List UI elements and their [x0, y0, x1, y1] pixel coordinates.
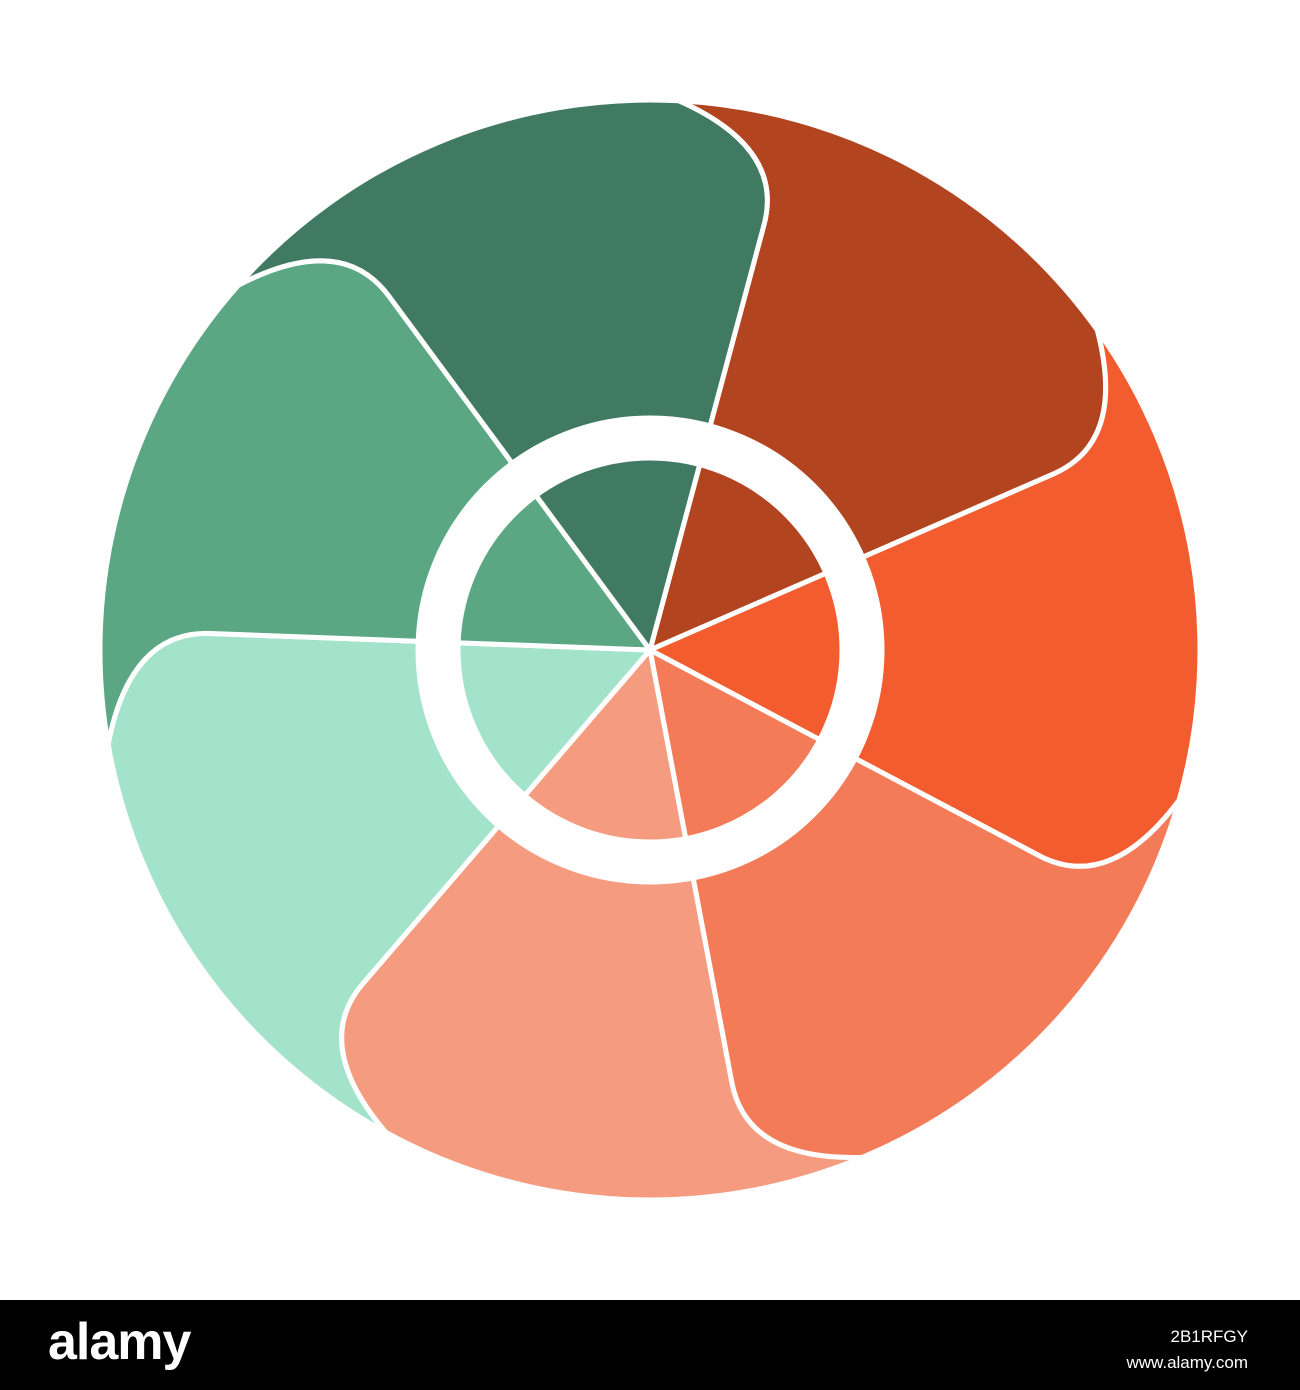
segment: mint: [6, 404, 737, 1141]
segment: dark green: [231, 0, 953, 718]
segment: light salmon: [280, 629, 865, 1260]
image id: www.alamy.com: [1126, 1353, 1248, 1372]
image id: 2B1RFGY: [1171, 1327, 1248, 1346]
center ring: [438, 438, 862, 862]
logo text: alamy: [48, 1313, 190, 1371]
segment: salmon: [474, 549, 1190, 1240]
segment: dark red: [539, 89, 1156, 747]
segment: orange: [604, 325, 1300, 995]
image id: [1126, 1327, 1248, 1372]
segment: green: [96, 253, 664, 764]
footer bar: [0, 1300, 1300, 1390]
